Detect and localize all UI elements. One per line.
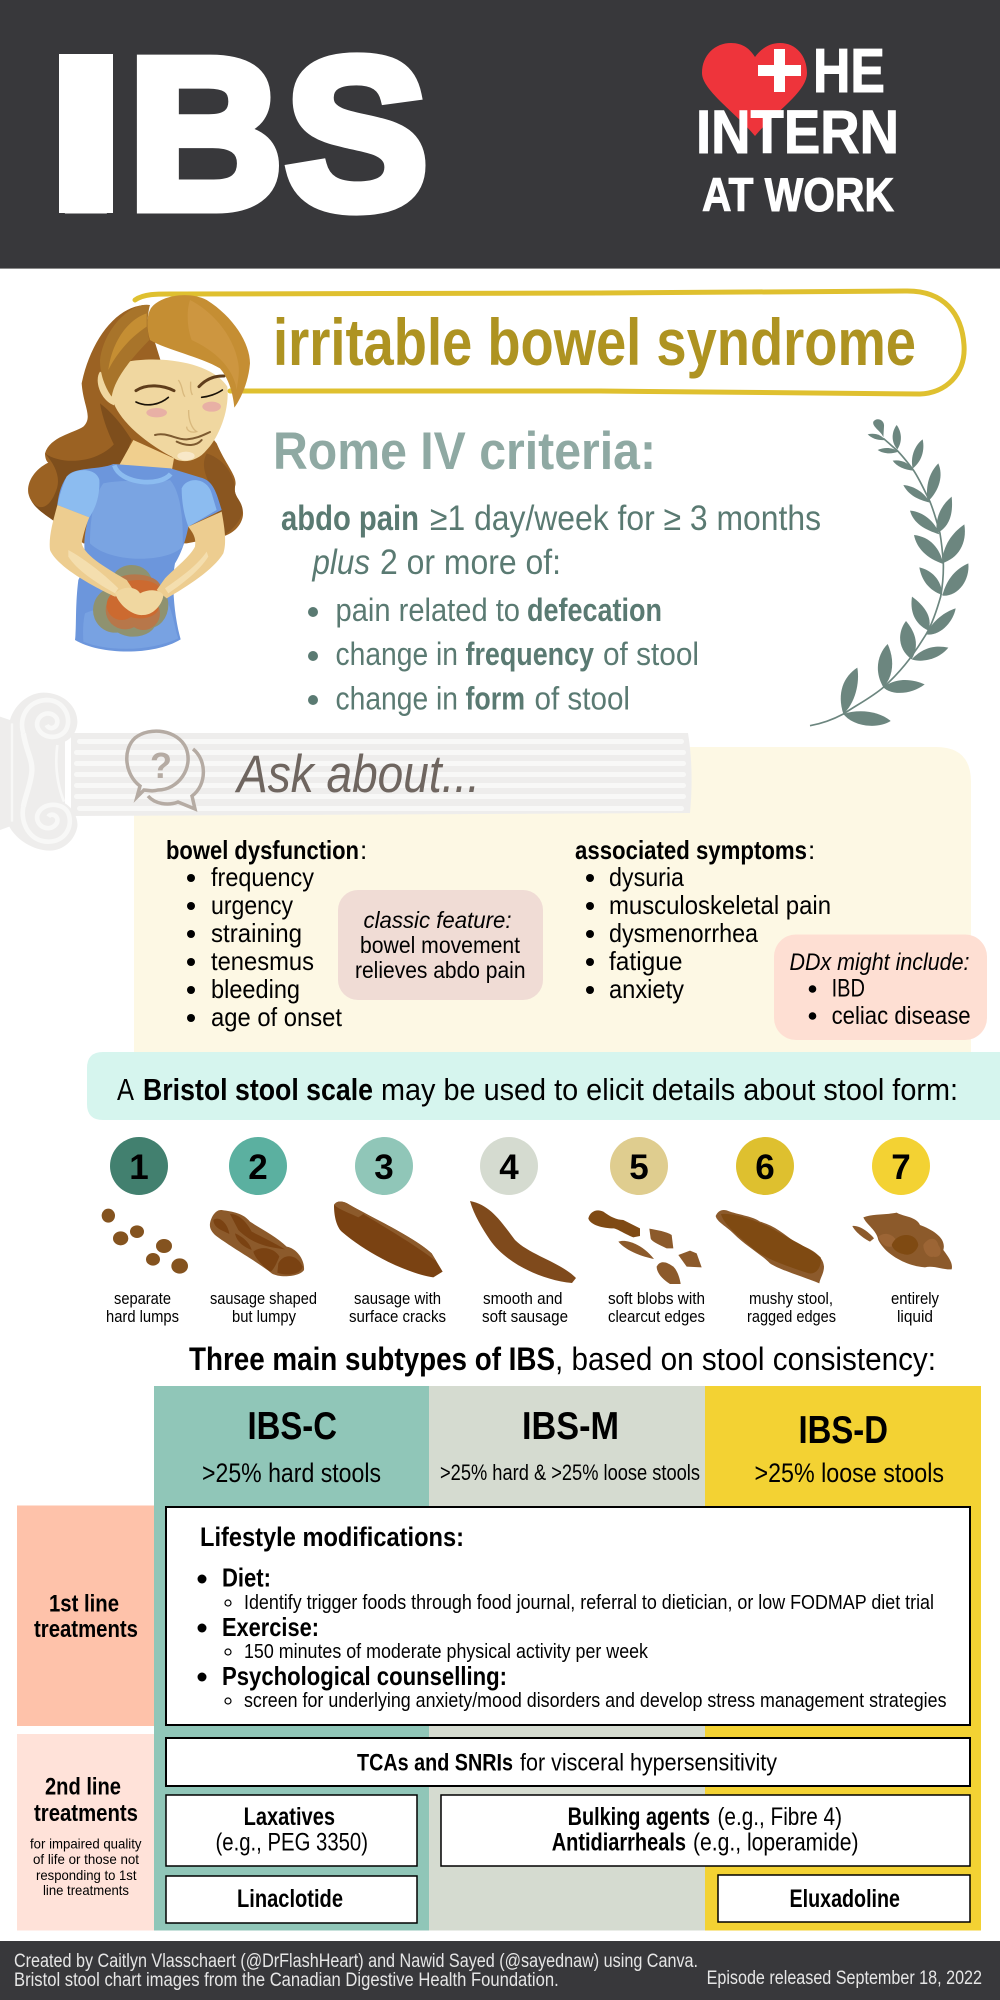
column heading: IBS-M: >25% hard & >25% loose stools [440,1460,700,1485]
box: bulking agents and antidiarrheals: (e.g., loperamide) [693,1828,858,1856]
row label: 2nd line treatments: for impaired quality [30,1836,142,1852]
heading: three main subtypes: , based on stool consistency: [555,1341,936,1377]
text block: bowel dysfunction: tenesmus [211,946,314,976]
box: linaclotide [166,1876,417,1923]
panel: lifestyle modifications: Diet: [222,1562,271,1592]
box: eluxadoline [718,1875,970,1922]
stool scale number circles [110,1137,930,1195]
stool scale captions: soft sausage [482,1308,568,1326]
stool scale captions: but lumpy [232,1308,297,1326]
footer: Created by Caitlyn Vlasschaert (@DrFlashHeart) and Nawid Sayed (@sayednaw) using Canva. [14,1951,698,1972]
stool scale number circles: 5 [629,1148,649,1187]
box: bulking agents and antidiarrheals: (e.g., Fibre 4) [718,1803,842,1831]
stool scale number circles: 3 [374,1148,394,1187]
logo: The Intern at Work: HE [813,37,885,106]
box: laxatives: (e.g., PEG 3350) [216,1828,368,1856]
panel: lifestyle modifications: 150 minutes of moderate physical activity per week [244,1640,649,1663]
callout: DDx: IBD [832,974,865,1002]
callout: classic feature: bowel movement [360,932,521,958]
text block: bowel dysfunction: age of onset [211,1002,343,1032]
row label: 2nd line treatments: responding to 1st [36,1867,137,1883]
heading: three main subtypes: Three main subtypes of IBS [189,1341,555,1377]
box: TCAs and SNRIs: TCAs and SNRIs [357,1750,513,1776]
footer [0,1941,1000,2000]
heading: Ask about: Ask about... [234,745,480,804]
box: linaclotide: Linaclotide [237,1885,343,1913]
banner: Bristol stool scale: Bristol stool scale [143,1072,373,1107]
text block: Rome IV criteria list: form [466,680,525,716]
text block: Rome IV criteria list: change in [336,680,458,716]
box: laxatives: Laxatives [244,1803,335,1831]
text block: associated symptoms: : [808,835,815,865]
stool scale number circles: 7 [891,1148,911,1187]
stool scale number circles: 1 [129,1148,149,1187]
text block: Rome IV criteria list: frequency [466,636,594,672]
stool scale captions: sausage shaped [210,1290,317,1308]
box: TCAs and SNRIs: for visceral hypersensitivity [520,1750,777,1776]
text block: Rome IV criteria list: 2 or more of: [380,543,561,582]
box: bulking agents and antidiarrheals [441,1795,970,1866]
callout: classic feature [338,890,543,1000]
icon: question speech bubbles [127,731,203,809]
stool scale captions: mushy stool, [749,1290,833,1308]
stool scale captions: entirely [891,1290,940,1308]
text block: Rome IV criteria list: defecation [527,592,662,628]
callout: DDx [774,934,987,1040]
text block: bowel dysfunction: bleeding [211,974,300,1004]
text block: associated symptoms: fatigue [609,946,682,976]
stool image type 4 [470,1201,576,1283]
heading: Rome IV criteria: Rome IV criteria: [273,422,656,481]
text block: bowel dysfunction: frequency [211,862,314,892]
stool scale captions: clearcut edges [608,1308,705,1326]
stool scale number circles: 4 [499,1148,519,1187]
stool scale captions: sausage with [354,1290,441,1308]
illustration: woman with abdominal pain [28,295,250,652]
stool images types 1 to 3 [102,1201,443,1277]
stool images types 5 to 7 [588,1210,952,1284]
logo: The Intern at Work [696,37,899,221]
text block: associated symptoms: musculoskeletal pain [609,890,831,920]
column backgrounds: IBS subtypes [154,1386,981,1930]
icon: laurel branch [810,419,968,726]
panel: ask about background [134,747,971,1060]
heading: three main subtypes [189,1341,936,1377]
column heading: IBS-C [202,1405,381,1488]
row label: 1st line treatments: treatments [34,1616,138,1643]
banner: Bristol stool scale [87,1052,1000,1120]
text block: bowel dysfunction: straining [211,918,302,948]
column heading: IBS-C: IBS-C [248,1405,337,1448]
box: eluxadoline: Eluxadoline [790,1885,900,1913]
callout: DDx: DDx might include: [790,949,970,976]
text block: Rome IV criteria list: of stool [534,680,630,716]
callout: classic feature: relieves abdo pain [355,957,526,983]
box: bulking agents and antidiarrheals: Bulking agents [568,1803,710,1831]
stool scale captions: hard lumps [106,1308,179,1326]
stool scale captions: separate [114,1290,171,1308]
box: laxatives [166,1795,417,1866]
row label: 1st line treatments: 1st line [49,1590,119,1618]
text block: Rome IV criteria list: pain related to [336,592,520,628]
stool scale number circles: 2 [248,1148,268,1187]
text block: Rome IV criteria list: of stool [603,636,699,672]
text block: associated symptoms: dysuria [609,862,684,892]
text block: bowel dysfunction: : [360,835,367,865]
stool scale captions [106,1290,940,1326]
stool scale captions: soft blobs with [608,1290,705,1308]
banner: Bristol stool scale: may be used to elicit details about stool form: [381,1072,958,1107]
column heading: IBS-M: IBS-M [522,1405,619,1448]
header band [0,0,1000,269]
title: IBS: IBS [56,13,428,254]
text block: Rome IV criteria list: plus [312,543,370,582]
panel: lifestyle modifications [166,1507,970,1725]
column graphic behind Ask about [0,693,692,851]
row label: 2nd line treatments [17,1734,154,1930]
stool scale captions: ragged edges [747,1308,836,1326]
text block: bowel dysfunction [166,835,367,1032]
row label: 2nd line treatments: of life or those not [33,1851,139,1867]
column heading: IBS-D [754,1409,944,1488]
stool scale captions: smooth and [483,1290,562,1308]
column heading: IBS-D: IBS-D [798,1409,888,1452]
row label: 1st line treatments [17,1506,154,1726]
row label: 2nd line treatments: treatments [34,1800,138,1827]
text block: bowel dysfunction: bowel dysfunction [166,835,359,865]
box: TCAs and SNRIs [166,1738,970,1786]
text block: Rome IV criteria list: ≥1 day/week for ≥ 3 months [430,499,821,538]
row label: 2nd line treatments: line treatments [43,1882,129,1898]
banner: Bristol stool scale: A [117,1072,134,1107]
callout: classic feature: classic feature: [364,907,512,933]
icon: question speech bubbles: ? [150,745,172,786]
column heading: IBS-C: >25% hard stools [202,1458,381,1488]
panel: lifestyle modifications: Exercise: [222,1612,319,1642]
text block: bowel dysfunction: urgency [211,890,293,920]
panel: lifestyle modifications: Lifestyle modifications: [200,1522,464,1552]
text block: associated symptoms: dysmenorrhea [609,918,758,948]
text block: Rome IV criteria list [281,499,821,716]
panel: lifestyle modifications: Psychological counselling: [222,1661,507,1691]
text block: Rome IV criteria list: change in [336,636,458,672]
logo: The Intern at Work: INTERN [696,98,899,166]
column heading: IBS-D: >25% loose stools [754,1458,944,1488]
text block: Rome IV criteria list: abdo pain [281,499,419,538]
text block: associated symptoms: associated symptoms [575,835,807,865]
box: bulking agents and antidiarrheals: Antidiarrheals [552,1828,686,1856]
brush outline around subtitle [135,291,964,394]
footer: Bristol stool chart images from the Canadian Digestive Health Foundation. [14,1970,559,1991]
stool scale captions: surface cracks [349,1308,446,1326]
stool scale captions: liquid [897,1308,933,1326]
stool scale number circles: 6 [755,1148,775,1187]
row label: 2nd line treatments: 2nd line [45,1774,121,1800]
callout: DDx: celiac disease [832,1002,971,1030]
logo: The Intern at Work: AT WORK [702,168,894,221]
column heading: IBS-M [440,1405,700,1485]
text block: associated symptoms [575,835,831,1004]
text block: associated symptoms: anxiety [609,974,684,1004]
